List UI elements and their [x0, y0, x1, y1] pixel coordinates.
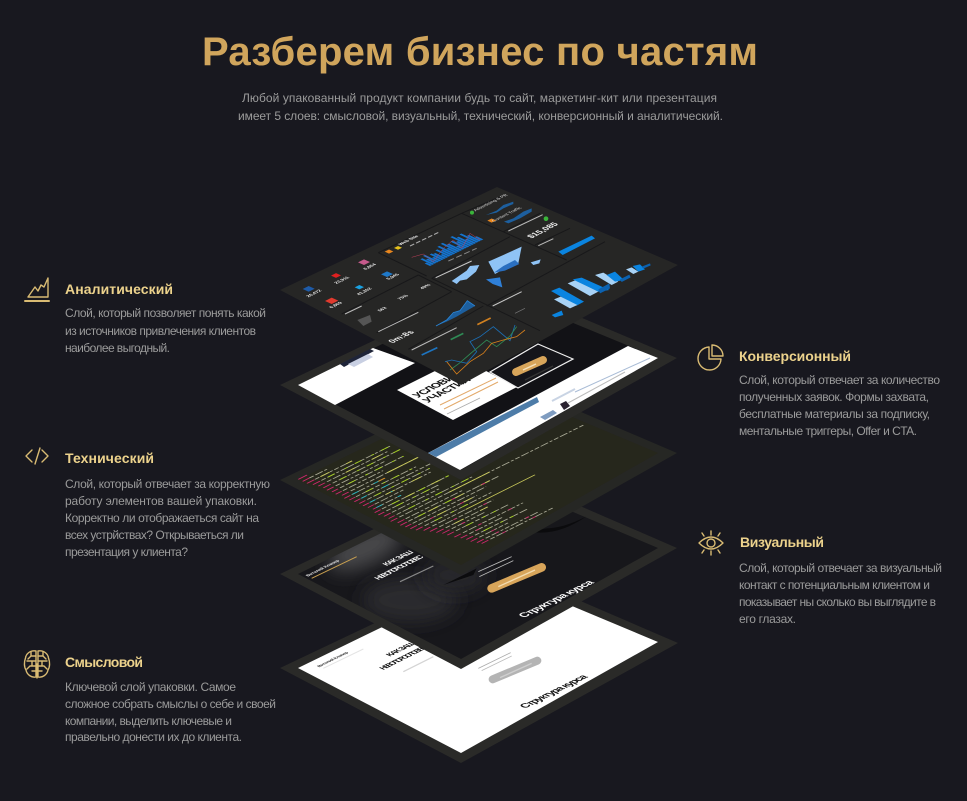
block: analytical layer: [25, 278, 266, 355]
icon: pie chart: [698, 345, 723, 370]
layer: visual dark design: Структура курса: [516, 579, 598, 619]
text: analytical description: [65, 306, 266, 355]
layer: semantic white wireframe: [280, 565, 678, 763]
text: semantic description: сложное собрать смыслы о себе и своей: [65, 697, 276, 711]
white conditions card: [397, 358, 517, 420]
subtitle text: Любой упакованный продукт компании будь то сайт, маркетинг-кит или презентация: [242, 91, 717, 105]
panel: stats row: [345, 283, 433, 326]
icon: eye: [699, 531, 723, 555]
block: technical layer: [26, 448, 270, 559]
panel: visit duration: 0m:8s: [385, 329, 417, 344]
heading: semantic: Смысловой: [65, 654, 143, 670]
text: analytical description: наиболее выгодный.: [65, 341, 170, 355]
text: technical description: Корректно ли отображаеться сайт на: [65, 511, 259, 525]
panel: world map: [436, 247, 541, 287]
text: visual description: [739, 561, 942, 626]
panel: social metrics: 26,472: [305, 289, 324, 298]
text: analytical description: Слой, который позволяет понять какой: [65, 306, 266, 320]
panel: line chart: [412, 318, 525, 374]
text: technical description: всех устрйствах? Открываеться ли: [65, 528, 244, 542]
text: visual description: контакт с потенциальным клиентом и: [739, 578, 930, 592]
panel: web site chart: [385, 231, 482, 265]
panel: social metrics: 5,945: [385, 273, 402, 281]
white conditions card: УЧАСТИЯ: [420, 376, 474, 404]
text: technical description: Слой, который отвечает за корректную: [65, 477, 270, 491]
panel: total revenue: $15,085: [524, 221, 561, 240]
layer: semantic white wireframe: КАК ЗАШ: [384, 640, 419, 657]
layer: semantic white wireframe: НЕВОЛОРОСЛОВЕС: [377, 644, 430, 671]
white social panel: [428, 346, 658, 470]
panel: stats row: 563: [376, 306, 389, 312]
text: visual description: показывает ны сколько вы выглядите в: [739, 595, 936, 609]
heading: analytical: Аналитический: [65, 281, 173, 297]
text: conversion description: [739, 373, 940, 438]
panel: social metrics: [303, 259, 402, 309]
white outlined button box: [490, 344, 573, 388]
panel: advertising and traffic: Advertising & PR: [472, 193, 511, 212]
icon: code brackets: [26, 448, 48, 464]
panel: social metrics: 41,202: [355, 287, 374, 296]
block: conversion layer: [698, 345, 940, 438]
icon: line chart: [25, 278, 49, 301]
layer: visual dark design: НЕВОЛОРОСЛОВЕС: [372, 554, 426, 581]
text: technical description: работу элементов вашей упаковки.: [65, 494, 257, 508]
heading: conversion: Конверсионный: [739, 348, 851, 364]
layer: semantic white wireframe: Виталий Клапер: [315, 650, 350, 668]
white hero block: [298, 348, 415, 405]
panel: social metrics: 6,864: [362, 263, 379, 271]
panel: visit duration: [378, 301, 475, 344]
layer: visual dark design: КАК ЗАШ: [380, 549, 416, 567]
panel: bar chart: [493, 263, 651, 317]
subtitle text: [238, 91, 723, 123]
panel: advertising and traffic: [470, 193, 532, 223]
panel: total revenue: [508, 215, 595, 255]
icon: brain: [24, 651, 50, 678]
text: conversion description: бесплатные материалы за подписку,: [739, 407, 930, 421]
text: semantic description: компании, выделить ключевые и: [65, 714, 232, 728]
text: semantic description: правельно донести их до клиента.: [65, 730, 242, 744]
text: semantic description: Ключевой слой упаковки. Самое: [65, 680, 236, 694]
layer stack illustration: [280, 187, 678, 763]
panel dividers: [342, 197, 605, 349]
title: Разберем бизнес по частям: [202, 30, 758, 74]
text: conversion description: ментальные триггеры, Offer и CTA.: [739, 424, 917, 438]
white conditions card: УСЛОВИЯ: [410, 371, 464, 399]
text: conversion description: Слой, который отвечает за количество: [739, 373, 940, 387]
layer: conversion forms: [280, 282, 677, 480]
text: conversion description: полученных заявок. Формы захвата,: [739, 390, 929, 404]
text: analytical description: из источников привлечения клиентов: [65, 324, 256, 338]
text: technical description: презентация у клиента?: [65, 545, 188, 559]
panel: web site chart: Web Site: [397, 234, 421, 246]
layer: visual dark design: [280, 507, 676, 669]
text: semantic description: [65, 680, 276, 744]
layer: technical code: [280, 376, 677, 575]
text: visual description: Слой, который отвечает за визуальный: [739, 561, 942, 575]
panel: social metrics: 23,911: [333, 276, 352, 285]
panel: stats row: 49%: [419, 283, 433, 290]
heading: technical: Технический: [65, 450, 154, 466]
subtitle text: имеет 5 слоев: смысловой, визуальный, технический, конверсионный и аналитический.: [238, 109, 723, 123]
layer: semantic white wireframe: Структура курса: [518, 674, 591, 710]
text: technical description: [65, 477, 270, 559]
text: visual description: его глазах.: [739, 612, 796, 626]
block: visual layer: [699, 531, 942, 626]
layer: analytics dashboard: [280, 187, 678, 385]
panel: advertising and traffic: Content Traffic: [490, 206, 524, 223]
layer: visual dark design: Виталий Клапер: [303, 559, 341, 577]
heading: visual: Визуальный: [740, 534, 824, 550]
panel: social metrics: 6,869: [328, 301, 345, 309]
panel: stats row: 75%: [396, 294, 411, 301]
block: semantic layer: [24, 651, 276, 744]
